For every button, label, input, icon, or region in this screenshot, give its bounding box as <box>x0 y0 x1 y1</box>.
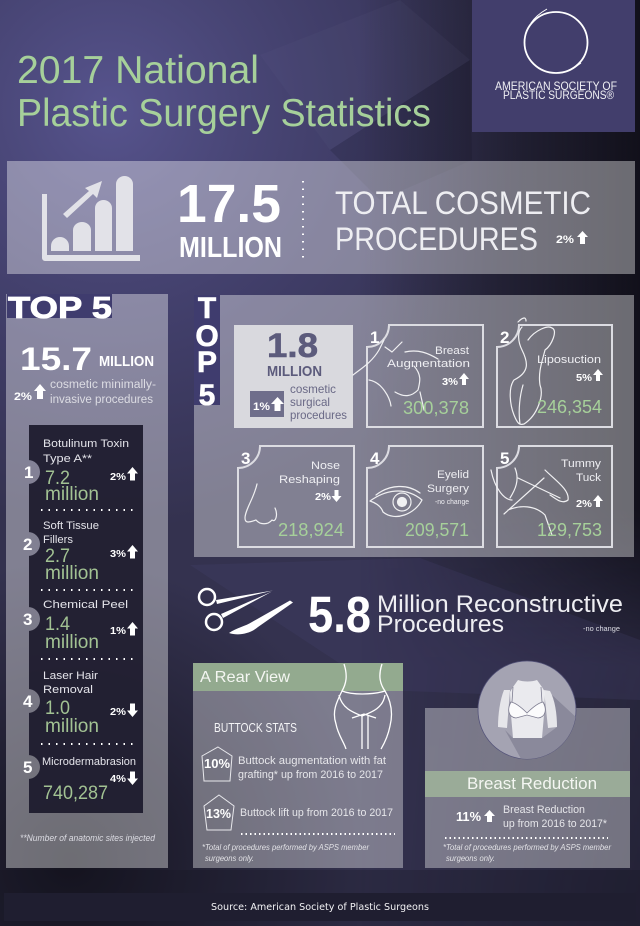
icon: circle with bra <box>478 660 576 760</box>
card 4: eyelid surgery: 4 <box>370 449 380 468</box>
card 4: eyelid surgery: Eyelid <box>437 469 469 481</box>
footnote: *Total of procedures performed by ASPS member <box>202 842 370 852</box>
stat: 15.7 million: 15.7 <box>20 341 92 377</box>
stat: 15.7 million <box>20 341 154 377</box>
card 5: tummy tuck: 5 <box>500 449 509 468</box>
card 3: nose reshaping <box>238 446 354 547</box>
item 3: chemical peel: Chemical Peel <box>43 599 128 611</box>
stat: 11% <box>456 804 608 830</box>
heading: O <box>195 320 219 353</box>
item 2: soft tissue fillers: Fillers <box>43 534 73 546</box>
card 1: breast augmentation: Breast <box>435 345 469 357</box>
illustration: hips <box>334 664 392 749</box>
card 4: eyelid surgery: -no change <box>435 497 469 506</box>
stat box: 1.8 million: 1% <box>253 401 270 413</box>
item 1: botulinum toxin: 1 <box>24 463 33 482</box>
heading: TOP 5 <box>8 290 112 325</box>
stat: 11%: up from 2016 to 2017* <box>503 818 608 830</box>
item 1: botulinum toxin: Botulinum Toxin <box>43 438 129 450</box>
reconstructive procedures: Million Reconstructive <box>377 591 623 618</box>
card 1: breast augmentation: 1 <box>370 328 379 347</box>
item 2: soft tissue fillers: 3% <box>110 548 127 560</box>
description: cosmetic minimally- <box>50 379 156 391</box>
bra <box>509 702 545 718</box>
source bar <box>4 893 636 921</box>
card 5: tummy tuck: Tuck <box>576 472 602 484</box>
illustration: nose <box>245 484 276 524</box>
change: 2% up: 2% <box>14 391 32 403</box>
label: TOTAL COSMETIC <box>335 185 591 221</box>
item 1: botulinum toxin: million <box>45 484 99 505</box>
stat: 10%: 10% <box>204 756 230 771</box>
panel: breast reduction <box>425 661 630 868</box>
reconstructive procedures: 5.8 <box>308 586 371 643</box>
card 3: nose reshaping: Nose <box>311 460 340 472</box>
card 2: liposuction: 246,354 <box>537 397 602 417</box>
item 5: microdermabrasion: Microdermabrasion <box>42 756 136 768</box>
torso <box>510 680 545 738</box>
big number: 17.5 <box>177 174 281 234</box>
card 2: liposuction: 5% <box>576 372 593 384</box>
card 5: tummy tuck: Tummy <box>561 458 602 470</box>
footnote: *Total of procedures performed by ASPS member <box>443 842 612 852</box>
header band <box>193 663 403 691</box>
card 2: liposuction <box>497 318 612 427</box>
card 1: breast augmentation: Augmentation <box>387 358 470 370</box>
item 2: soft tissue fillers: 2 <box>23 535 32 554</box>
item 4: laser hair removal: 2% <box>110 706 127 718</box>
card 5: tummy tuck: 2% <box>576 498 593 510</box>
item 1: botulinum toxin: 7.2 <box>45 468 70 489</box>
card 4: eyelid surgery <box>367 446 483 547</box>
stat: 13% <box>204 795 393 830</box>
logo text: PLASTIC SURGEONS® <box>503 88 614 102</box>
heading: T <box>198 292 216 325</box>
header band: A Rear View <box>200 669 290 686</box>
stat: 11%: 11% <box>456 809 481 824</box>
big number <box>177 174 282 264</box>
footnote: **Number of anatomic sites injected <box>20 833 156 843</box>
change: 2% up <box>14 384 46 403</box>
item 3: chemical peel: million <box>45 632 99 653</box>
header band: Breast Reduction <box>467 774 597 793</box>
reconstructive procedures: Procedures <box>377 611 504 638</box>
item 3: chemical peel: 1% <box>110 625 127 637</box>
card 1: breast augmentation <box>353 325 483 427</box>
label: PROCEDURES <box>335 221 538 257</box>
title: 2017 National <box>17 49 259 92</box>
item 2: soft tissue fillers: Soft Tissue <box>43 520 99 532</box>
icon: growth chart <box>42 176 140 261</box>
icon: forceps and scalpel <box>199 589 293 634</box>
card 4: eyelid surgery: Surgery <box>427 483 470 495</box>
card 2: liposuction: Liposuction <box>537 354 601 366</box>
item 5: microdermabrasion: 4% <box>110 773 127 785</box>
card 5: tummy tuck <box>491 446 612 547</box>
item 5: microdermabrasion <box>23 756 138 804</box>
stat box: 1.8 million: cosmetic <box>290 382 336 396</box>
illustration: chest <box>353 340 438 410</box>
title <box>17 49 431 135</box>
card 3: nose reshaping: 3 <box>241 449 250 468</box>
item 1: botulinum toxin <box>24 438 138 505</box>
subheading: BUTTOCK STATS <box>214 721 297 735</box>
panel: total cosmetic procedures <box>7 161 635 274</box>
card 5: tummy tuck: 129,753 <box>537 520 602 540</box>
illustration: body outline <box>510 318 554 424</box>
change: 2% up <box>556 231 588 246</box>
footnote: surgeons only. <box>446 853 495 863</box>
heading: 5 <box>199 379 215 412</box>
illustration: tummy tuck <box>491 468 568 535</box>
item 4: laser hair removal: 4 <box>23 692 33 711</box>
big number: MILLION <box>179 232 282 264</box>
card 4: eyelid surgery: 209,571 <box>405 520 469 540</box>
header band <box>425 771 630 797</box>
item 5: microdermabrasion: 5 <box>23 758 32 777</box>
card 3: nose reshaping: 2% <box>315 491 332 503</box>
item 3: chemical peel <box>23 599 138 653</box>
item 2: soft tissue fillers <box>23 520 138 584</box>
item 3: chemical peel: 1.4 <box>45 614 70 635</box>
footnote <box>202 842 370 863</box>
footnote <box>443 842 612 863</box>
reconstructive procedures <box>308 586 623 643</box>
stat: 13%: Buttock lift up from 2016 to 2017 <box>240 807 393 819</box>
stat: 13%: 13% <box>206 806 231 821</box>
source bar: Source: American Society of Plastic Surgeons <box>211 902 429 913</box>
description: invasive procedures <box>50 394 153 406</box>
item 4: laser hair removal <box>23 670 138 737</box>
card 3: nose reshaping: 218,924 <box>278 520 344 540</box>
panel: top 5 surgical <box>194 292 634 557</box>
stat box: 1.8 million: surgical <box>290 395 330 409</box>
panel: a rear view <box>193 663 403 868</box>
stat box: 1.8 million: procedures <box>290 408 347 422</box>
item 2: soft tissue fillers: 2.7 <box>45 546 70 567</box>
stat: 10% <box>202 747 386 781</box>
card 1: breast augmentation: 300,378 <box>403 398 469 418</box>
item 5: microdermabrasion: 740,287 <box>43 783 108 804</box>
item 4: laser hair removal: Laser Hair <box>43 670 98 682</box>
card 1: breast augmentation: 3% <box>442 376 459 388</box>
reconstructive procedures: -no change <box>583 624 620 633</box>
logo text: AMERICAN SOCIETY OF <box>495 79 617 93</box>
stat: 10%: Buttock augmentation with fat <box>238 755 386 767</box>
stat: 10%: grafting* up from 2016 to 2017 <box>238 769 383 781</box>
description <box>50 379 156 406</box>
heading: P <box>197 346 217 379</box>
card 3: nose reshaping: Reshaping <box>279 474 340 486</box>
stat: 15.7 million: MILLION <box>99 353 154 370</box>
logo text <box>495 79 617 102</box>
item 4: laser hair removal: 1.0 <box>45 698 70 719</box>
stat box: 1.8 million: 1.8 <box>267 327 318 365</box>
logo panel <box>472 0 635 132</box>
item 1: botulinum toxin: Type A** <box>43 453 93 465</box>
illustration: eye <box>370 486 422 516</box>
heading <box>194 292 220 412</box>
stat box: 1.8 million <box>234 325 353 428</box>
ranked list panel <box>23 425 143 813</box>
panel: top 5 minimally invasive <box>6 290 168 868</box>
arms <box>498 690 510 728</box>
item 3: chemical peel: 3 <box>23 610 32 629</box>
item 4: laser hair removal: million <box>45 716 99 737</box>
footnote: surgeons only. <box>205 853 254 863</box>
change: 2% up: 2% <box>556 234 574 246</box>
card 2: liposuction: 2 <box>500 328 509 347</box>
icon: logo ring <box>524 9 588 73</box>
label <box>335 185 591 257</box>
stat box: 1.8 million: MILLION <box>267 363 322 380</box>
item 1: botulinum toxin: 2% <box>110 471 127 483</box>
item 4: laser hair removal: Removal <box>43 684 93 696</box>
stat: 11%: Breast Reduction <box>503 804 585 816</box>
title: Plastic Surgery Statistics <box>17 92 431 135</box>
item 2: soft tissue fillers: million <box>45 563 99 584</box>
